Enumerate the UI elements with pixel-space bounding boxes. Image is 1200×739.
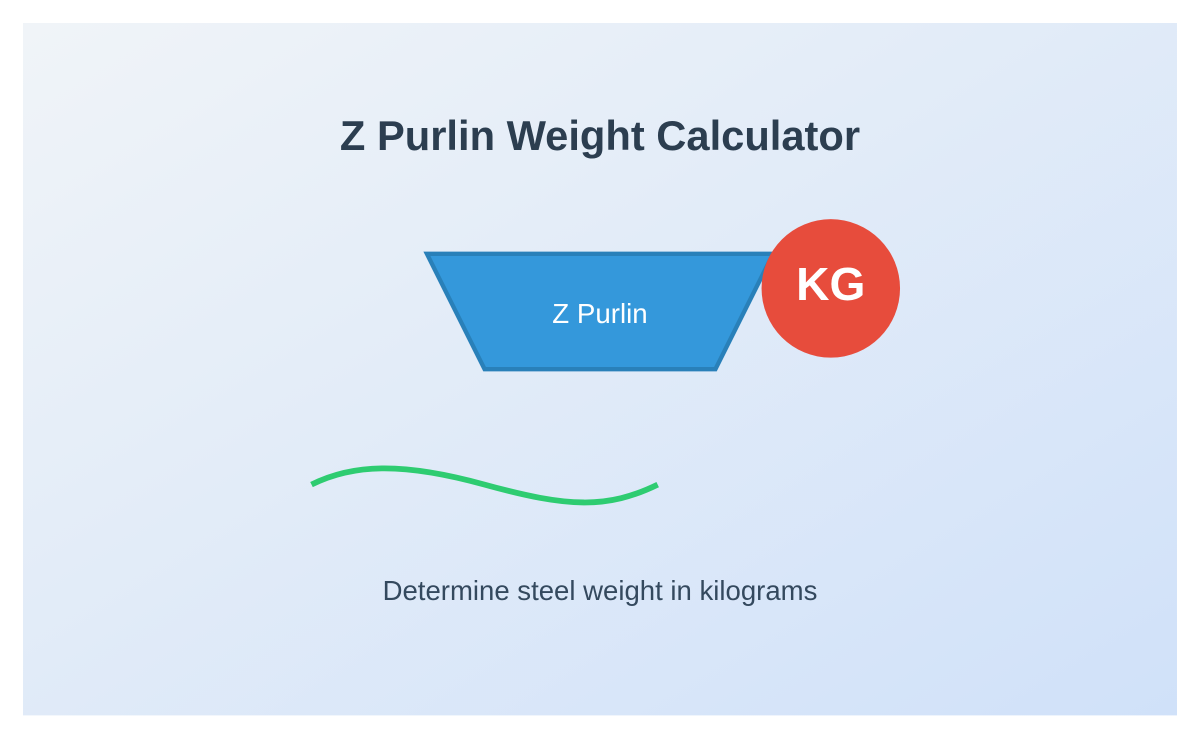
- title: Z Purlin Weight Calculator: [340, 112, 860, 159]
- wave line: [312, 469, 658, 503]
- caption: Determine steel weight in kilograms: [383, 575, 817, 606]
- label: Z Purlin: Z Purlin: [552, 298, 648, 329]
- badge circle: [762, 219, 900, 358]
- purlin shape with label: [427, 254, 773, 369]
- trapezoid: purlin profile: [427, 254, 773, 369]
- badge: KG: [762, 219, 900, 358]
- badge text: KG: [796, 258, 865, 310]
